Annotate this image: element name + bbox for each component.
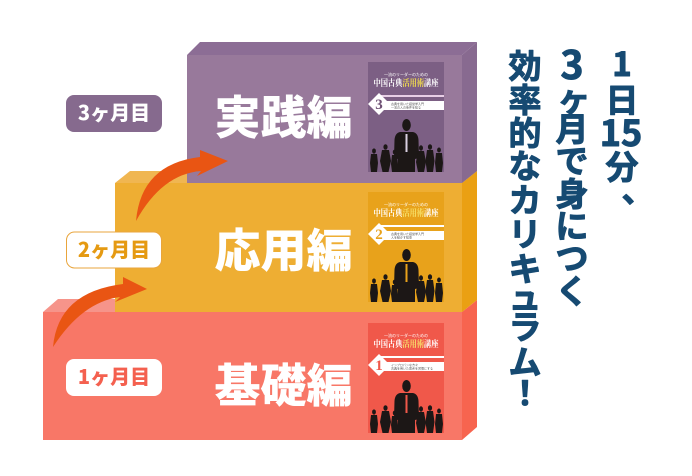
headline: left column: カ <box>508 174 542 222</box>
headline: left column: な <box>508 140 542 188</box>
headline: middle column: に <box>556 200 588 248</box>
headline: right column: 、 <box>622 164 654 212</box>
heading: 基礎編: 基礎編 <box>214 350 352 416</box>
headline: left column: キ <box>508 243 542 291</box>
label: 2ヶ月目: 2ヶ月目 <box>78 234 150 263</box>
book cover: volume 3 <box>368 62 444 172</box>
book cover: volume 3: 古典を用いた経営学入門 <box>391 101 424 106</box>
book cover: volume 2: 人を動かす知恵 <box>391 234 412 240</box>
headline: middle column: ヶ <box>558 73 590 121</box>
label: 1ヶ月目: 1ヶ月目 <box>78 361 150 390</box>
headline: left column: ム <box>508 336 542 384</box>
book cover: volume 3: 3 <box>375 97 383 113</box>
book cover: volume 2: 一流のリーダーのための <box>384 201 428 208</box>
book cover: volume 1: 古典を用いた思考を習慣にする <box>391 366 433 370</box>
headline: left column: 的 <box>508 107 542 155</box>
panel: step 3 box (practical course) <box>187 42 477 183</box>
book cover: volume 2: 古典を用いた経営学入門 <box>391 231 424 236</box>
headline: middle column: つ <box>556 232 588 280</box>
headline: left column: 効 <box>508 40 542 88</box>
headline: right column <box>600 38 654 212</box>
label: 3ヶ月目 <box>66 95 162 132</box>
label: 1ヶ月目 <box>66 359 162 396</box>
headline: left column: ラ <box>508 301 542 349</box>
book cover: volume 1: 中国古典活用術講座 <box>374 337 439 350</box>
book cover: volume 3: 一流のリーダーのための <box>384 71 428 78</box>
panel: step 1 box (basic course) <box>43 299 477 440</box>
label: 3ヶ月目: 3ヶ月目 <box>78 97 150 126</box>
heading: 実践編: 実践編 <box>214 82 352 148</box>
arrow: month 1 to month 2 <box>53 277 147 347</box>
headline: middle column: で <box>556 135 588 183</box>
headline: left column: ュ <box>508 271 542 319</box>
headline: left column: ！ <box>508 367 542 415</box>
headline: right column: 日 <box>606 74 638 122</box>
book cover: volume 1: 1 <box>375 358 383 374</box>
headline: middle column: 身 <box>556 168 588 216</box>
heading: 応用編: 応用編 <box>214 215 352 281</box>
headline: left column <box>508 40 542 415</box>
label: 2ヶ月目 <box>66 232 162 268</box>
headline: right column: 分 <box>606 141 638 189</box>
headline: middle column: く <box>556 265 588 313</box>
book cover: volume 1: インプロパンな方々 <box>391 362 418 367</box>
headline: right column: 15 <box>600 105 642 157</box>
headline: middle column: 3 <box>560 35 584 91</box>
headline: left column: リ <box>508 208 542 256</box>
headline: middle column <box>556 35 590 313</box>
book cover: volume 2: 中国古典活用術講座 <box>374 206 439 219</box>
book cover: volume 2 <box>368 192 444 302</box>
book cover: volume 2: 2 <box>375 227 383 243</box>
book cover: volume 1: 一流のリーダーのための <box>384 332 428 339</box>
headline: left column: 率 <box>508 74 542 122</box>
book cover: volume 3: 一流の人の条件を知る <box>391 104 421 110</box>
arrow: month 2 to month 3 <box>136 150 228 221</box>
book cover: volume 1 <box>368 323 444 433</box>
headline: middle column: 月 <box>556 103 588 151</box>
panel: step 2 box (applied course) <box>115 171 477 312</box>
book cover: volume 3: 中国古典活用術講座 <box>374 76 439 89</box>
headline: right column: 1 <box>612 38 632 86</box>
